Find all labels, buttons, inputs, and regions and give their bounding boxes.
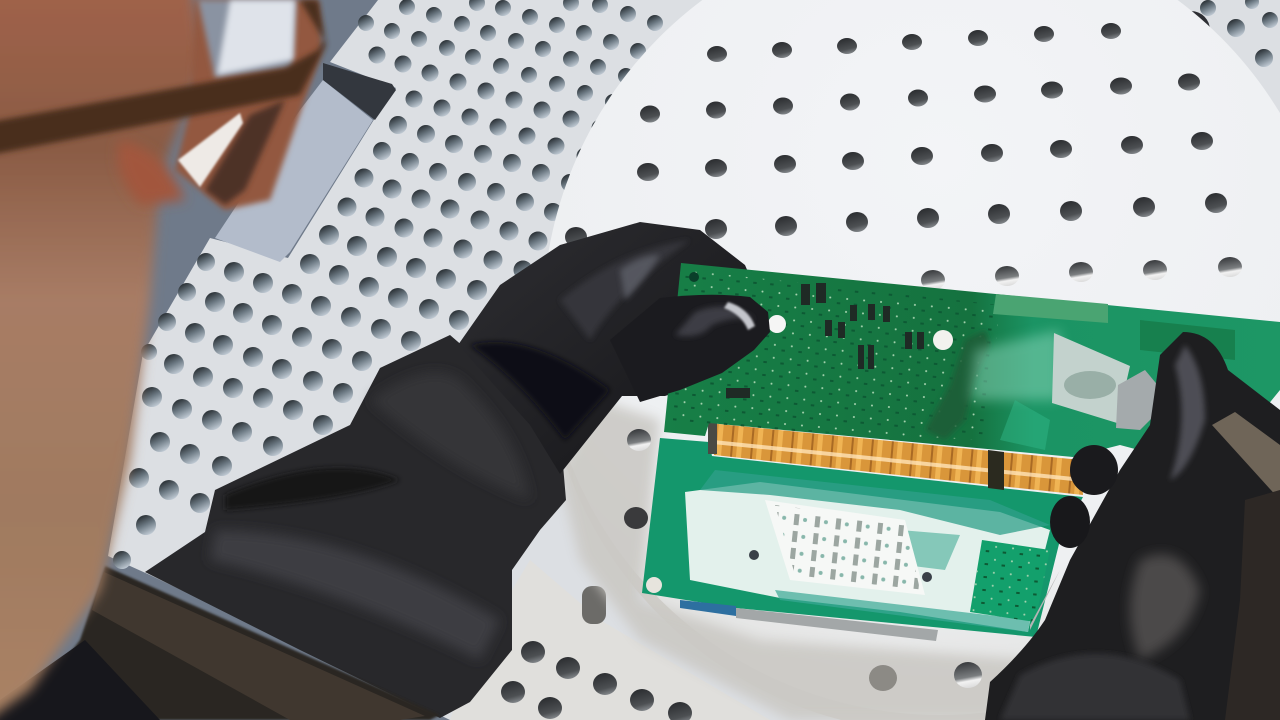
right board edge detail (1140, 320, 1235, 360)
lower circuit board (642, 438, 1083, 641)
plated white area (685, 482, 1050, 632)
plate slot (215, 80, 373, 262)
large dark hole at top right (1172, 11, 1210, 49)
metal tube (1212, 412, 1280, 500)
sleeve (145, 335, 566, 718)
mounting hole (933, 330, 953, 350)
plate holes (113, 0, 1278, 569)
brown frame arm (0, 0, 326, 155)
sprayed coating mist (970, 330, 1060, 400)
fingers (1070, 445, 1118, 495)
shadow on the disc beneath the boards (558, 400, 1030, 720)
lens (175, 0, 322, 210)
glove highlights (1170, 345, 1205, 480)
components (726, 283, 924, 398)
disc holes (565, 23, 1227, 247)
palm (458, 222, 760, 474)
white round disc (543, 0, 1280, 720)
spray nozzle (1052, 333, 1170, 430)
scorched coating edge (925, 330, 990, 440)
flexible orange connector (708, 422, 1083, 495)
safety glasses (0, 0, 326, 210)
connector pads (993, 294, 1108, 323)
lower plate area (450, 560, 770, 720)
peg (582, 586, 606, 624)
left glove sleeve and palm (145, 222, 760, 718)
upper circuit board (664, 263, 1280, 470)
silver strip under the board (736, 608, 938, 641)
teal traces (700, 470, 1050, 535)
dark notch (323, 63, 396, 120)
worker's blurred face (0, 0, 205, 720)
green soldered patch (970, 540, 1050, 622)
left glove finger over the board (610, 295, 770, 402)
blurred dark frame at bottom left (0, 566, 440, 720)
right glove (985, 332, 1280, 720)
